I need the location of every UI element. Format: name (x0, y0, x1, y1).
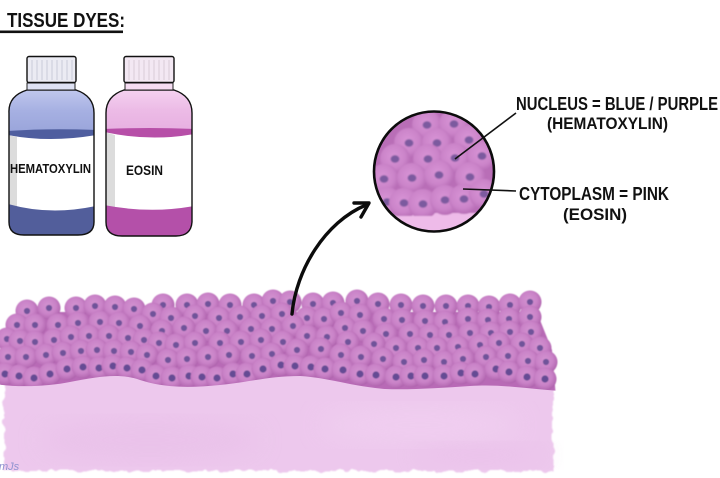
label: hematoxylin: HEMATOXYLIN (10, 161, 91, 176)
epithelium cell layer (0, 290, 558, 398)
callout: nucleus (455, 94, 718, 159)
arrow: tissue to magnified view (292, 203, 369, 314)
callout: cytoplasm (463, 184, 669, 224)
title: tissue dyes: TISSUE DYES: (7, 10, 125, 32)
callout: cytoplasm: CYTOPLASM = PINK (519, 184, 669, 204)
label: eosin: EOSIN (126, 162, 163, 178)
callout: nucleus: (HEMATOXYLIN) (547, 114, 668, 133)
icon: hematoxylin bottle (5, 56, 97, 238)
callout: cytoplasm: (EOSIN) (563, 205, 627, 224)
magnified cell circle (372, 110, 496, 233)
icon: eosin bottle (104, 56, 196, 238)
connective tissue layer (4, 372, 553, 471)
